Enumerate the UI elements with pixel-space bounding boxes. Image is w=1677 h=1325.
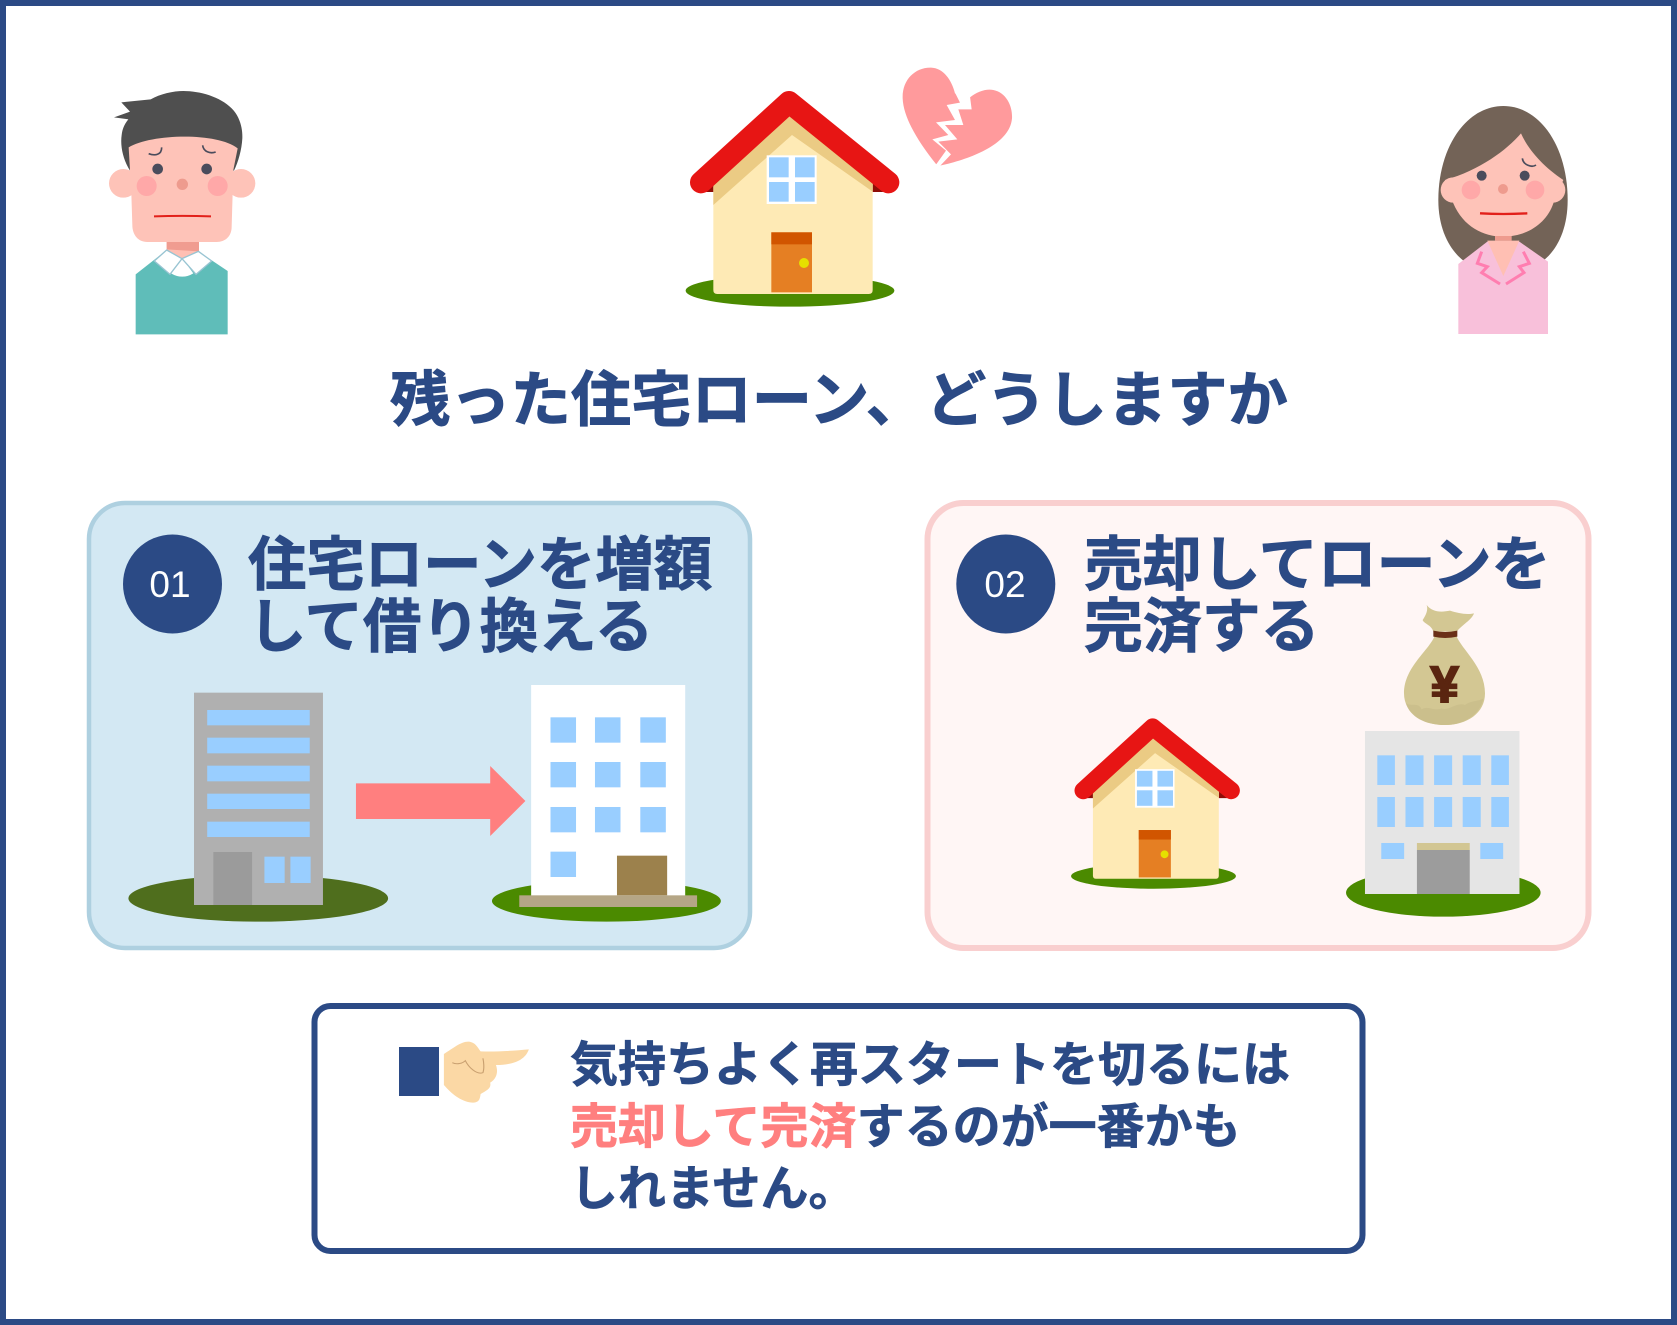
panel: option 01 refinance bbox=[89, 503, 750, 948]
number badge 01: 01 bbox=[149, 564, 191, 605]
panel: option 02 sell bbox=[928, 503, 1588, 948]
conclusion text: 売却して完済 bbox=[570, 1101, 857, 1154]
callout: conclusion bbox=[314, 1006, 1362, 1251]
number badge 01 bbox=[123, 534, 222, 634]
icon: old grey building bbox=[128, 693, 388, 922]
heading 02: 売却してローンを bbox=[1084, 533, 1550, 598]
icon: new white building bbox=[492, 685, 721, 922]
icon: worried woman bbox=[1438, 106, 1568, 334]
icon: house bbox=[686, 102, 894, 307]
number badge 02: 02 bbox=[984, 564, 1026, 605]
conclusion text: するのが一番かも bbox=[857, 1101, 1241, 1154]
conclusion text: 気持ちよく再スタートを切るには bbox=[570, 1039, 1290, 1092]
heading 01: して借り換える bbox=[248, 595, 653, 660]
icon: worried man bbox=[109, 91, 255, 334]
conclusion text: しれません。 bbox=[570, 1163, 857, 1216]
icon: pointing hand bbox=[444, 1042, 529, 1103]
title: 残った住宅ローン、どうしますか bbox=[390, 366, 1288, 434]
icon: office building bbox=[1346, 731, 1541, 917]
heading 02: 完済する bbox=[1084, 595, 1320, 660]
icon: small house bbox=[1071, 727, 1236, 889]
arrow bbox=[356, 766, 525, 836]
icon: broken heart bbox=[903, 68, 1012, 166]
heading 01: 住宅ローンを増額 bbox=[248, 533, 712, 598]
icon: money bag: ¥ bbox=[1430, 656, 1459, 713]
bullet square bbox=[399, 1047, 439, 1096]
icon: money bag bbox=[1404, 605, 1485, 725]
number badge 02 bbox=[956, 534, 1055, 634]
